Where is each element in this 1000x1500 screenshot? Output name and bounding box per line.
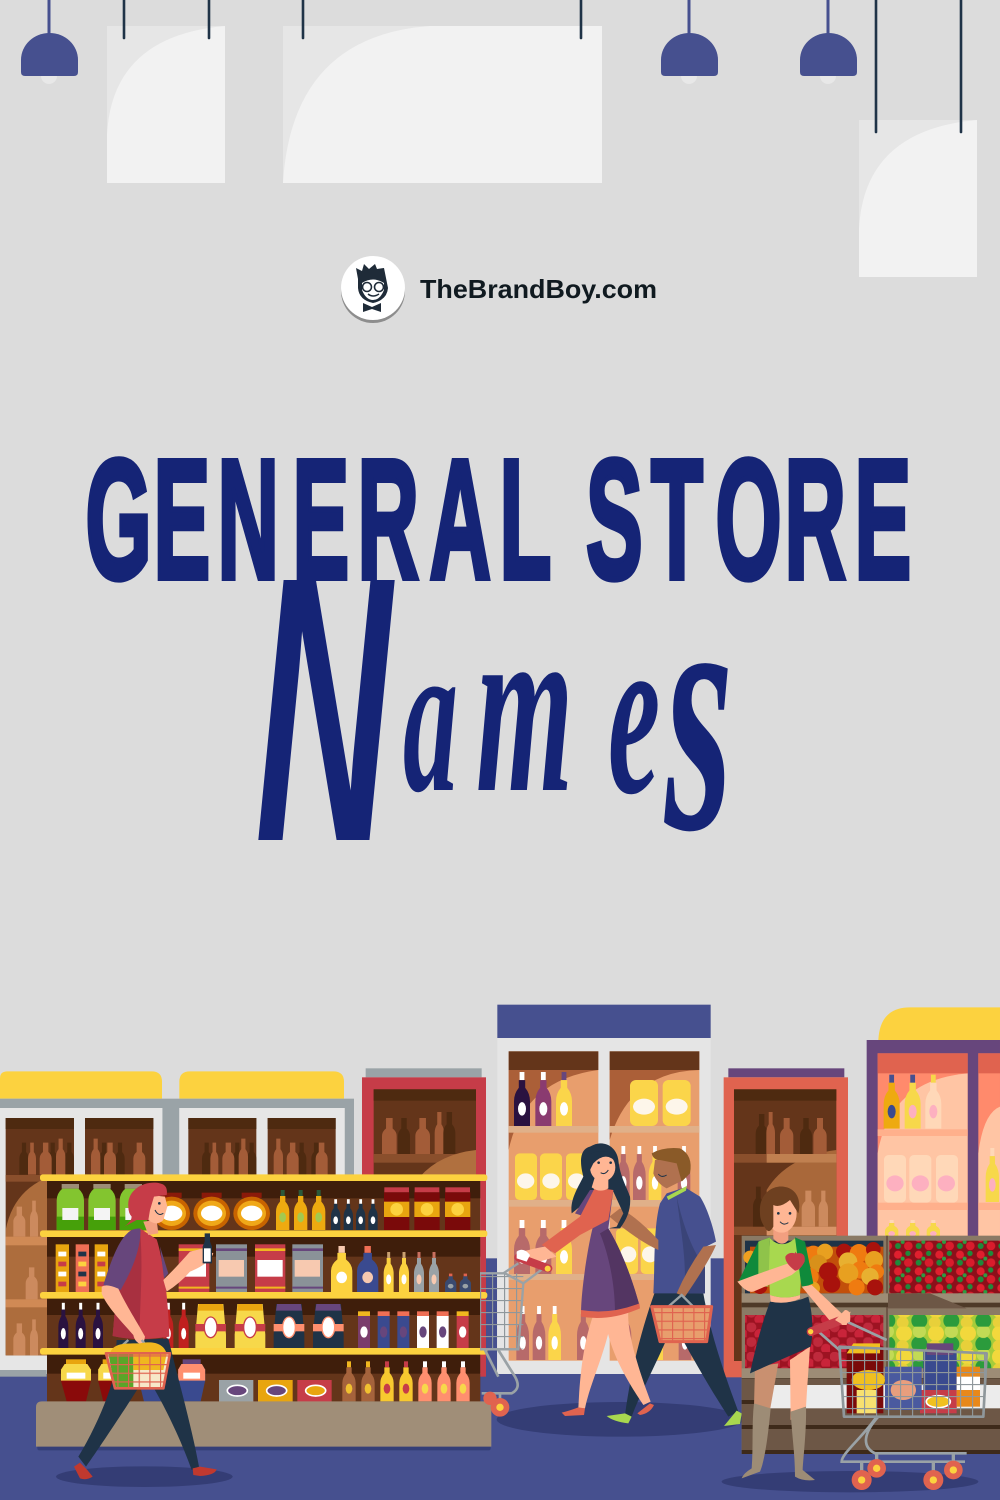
man shopper bbox=[607, 1148, 742, 1426]
shelf row 1 products bbox=[57, 1184, 470, 1230]
white fridges bbox=[0, 1099, 354, 1377]
shelves bbox=[40, 1174, 487, 1355]
hands on cart handle bbox=[517, 1247, 557, 1272]
shoes bbox=[607, 1411, 742, 1426]
legs bbox=[78, 1338, 199, 1470]
ceiling signs and lamps bbox=[21, 0, 977, 277]
fridge products bbox=[514, 1072, 691, 1360]
blue column bbox=[486, 1258, 497, 1378]
woman shopper in dress bbox=[517, 1143, 654, 1416]
oranges crate bbox=[743, 1242, 884, 1295]
head bbox=[760, 1186, 799, 1244]
shelf base bbox=[36, 1401, 491, 1450]
arms bbox=[102, 1248, 213, 1345]
logo bbox=[341, 256, 657, 323]
hair bbox=[571, 1143, 630, 1228]
basket bbox=[652, 1295, 712, 1342]
cart and woman floor shadow bbox=[722, 1471, 978, 1492]
top bbox=[738, 1237, 813, 1303]
lamp 3 bbox=[800, 0, 857, 84]
couple floor shadow bbox=[497, 1402, 743, 1437]
cart bbox=[808, 1310, 987, 1490]
shelf row 3 products bbox=[58, 1303, 469, 1348]
cart basket bbox=[839, 1347, 987, 1417]
title: names script: m bbox=[476, 567, 573, 844]
title: general store: GENERAL STORE bbox=[86, 425, 911, 615]
apple bbox=[785, 1252, 805, 1271]
trousers bbox=[625, 1292, 738, 1417]
store floor bbox=[0, 1374, 1000, 1500]
fridge caps bbox=[0, 1071, 344, 1099]
shoes bbox=[562, 1403, 654, 1416]
hanging sign right bbox=[859, 0, 977, 277]
title: names script: e bbox=[608, 583, 660, 844]
centre fridge bbox=[497, 1005, 711, 1374]
gondola shelf unit bbox=[40, 1174, 487, 1402]
apples crate bbox=[745, 1315, 1000, 1368]
arms bbox=[737, 1263, 851, 1325]
logo badge bbox=[341, 256, 405, 323]
shirt bbox=[653, 1187, 716, 1293]
logo wordmark: TheBrandBoy.com bbox=[420, 274, 657, 304]
hanging sign centre bbox=[283, 0, 602, 183]
cart handle bbox=[808, 1310, 850, 1334]
right store section bbox=[480, 1005, 1000, 1492]
shelf row 2 products bbox=[56, 1244, 471, 1292]
legs bbox=[754, 1347, 810, 1420]
title: names script: a bbox=[403, 594, 458, 838]
orange fridge bbox=[724, 1068, 848, 1377]
head bbox=[652, 1148, 691, 1188]
bottle in hand bbox=[203, 1233, 212, 1263]
cart contents bbox=[847, 1343, 980, 1413]
shelf row 4 products bbox=[61, 1359, 470, 1402]
blue columns bbox=[710, 1258, 725, 1375]
cart wheels bbox=[852, 1459, 963, 1490]
legs bbox=[578, 1312, 651, 1408]
small cart bbox=[480, 1263, 543, 1417]
shopper with basket bbox=[56, 1183, 233, 1487]
dress bbox=[575, 1190, 640, 1318]
head bbox=[585, 1151, 617, 1191]
lamp 1 bbox=[21, 0, 78, 84]
purple fridge bbox=[867, 1007, 1000, 1240]
skirt bbox=[750, 1297, 812, 1373]
title: names script: s bbox=[662, 516, 733, 904]
red fridge bbox=[362, 1068, 486, 1181]
sleeve bbox=[103, 1229, 141, 1290]
head bbox=[124, 1183, 167, 1235]
feet bbox=[74, 1463, 217, 1479]
floor shadow bbox=[56, 1466, 233, 1487]
title: names script: N bbox=[255, 498, 397, 921]
basket bbox=[106, 1340, 170, 1388]
hanging sign left bbox=[107, 0, 225, 183]
arms bbox=[609, 1208, 716, 1297]
lamp 2 bbox=[661, 0, 718, 84]
boots bbox=[742, 1403, 815, 1480]
sleeve bbox=[542, 1187, 613, 1253]
collar bbox=[667, 1186, 687, 1200]
vest bbox=[113, 1228, 169, 1339]
left store section bbox=[0, 1068, 497, 1487]
woman shopper with apple bbox=[737, 1186, 987, 1490]
produce stand bbox=[742, 1236, 1000, 1454]
